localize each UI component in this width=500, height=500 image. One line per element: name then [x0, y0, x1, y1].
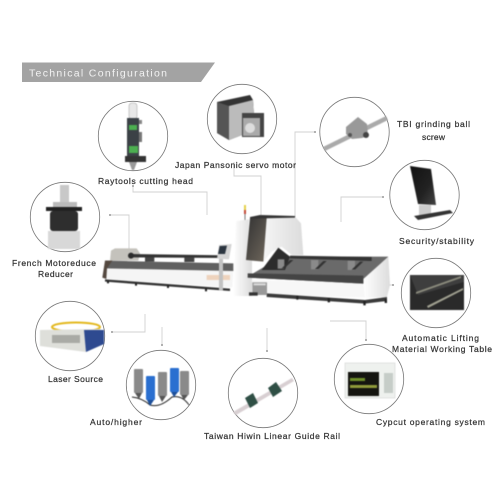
- title banner: [22, 62, 215, 82]
- right bed: [246, 215, 390, 305]
- panel: Auto/higher: [90, 350, 196, 427]
- panel: Laser Source: Laser Source: [48, 374, 103, 384]
- panel: Laser Source: [35, 301, 105, 384]
- panel: Japan Pansonic servo motor: [175, 84, 296, 170]
- icon: linear guide rail: [233, 378, 294, 415]
- icon: servo drive and motor: [217, 95, 264, 140]
- left bed: [102, 244, 233, 291]
- panel: French Motoreduce Reducer: [12, 182, 100, 279]
- title banner: Technical Configuration: [29, 68, 167, 80]
- icon: reducer: [46, 185, 82, 249]
- panel: French Motoreduce Reducer: French Motoreduce: [12, 258, 96, 268]
- panel: Cypcut operating system: [334, 344, 485, 427]
- panel: Security/stability: Security/stability: [399, 236, 475, 246]
- panel: TBI grinding ball screw: [320, 97, 470, 167]
- panel: Automatic Lifting Material Working Table: [392, 258, 492, 354]
- panel: TBI grinding ball screw: TBI grinding ball: [397, 119, 470, 129]
- panel: Raytools cutting head: [98, 101, 193, 186]
- warning light: [244, 205, 246, 210]
- panel: TBI grinding ball screw: screw: [422, 132, 446, 142]
- column: [233, 219, 252, 296]
- panel: Automatic Lifting Material Working Table: Automatic Lifting: [402, 333, 479, 343]
- panel: Cypcut operating system: Cypcut operating system: [376, 417, 485, 427]
- panel: French Motoreduce Reducer: Reducer: [38, 269, 73, 279]
- panel: Japan Pansonic servo motor: Japan Pansonic servo motor: [175, 160, 296, 170]
- icon: sensors: [132, 368, 189, 406]
- icon: cutting head: [125, 103, 146, 170]
- icon: software screen: [345, 363, 395, 398]
- icon: monitor on stand: [410, 166, 453, 220]
- panel: Taiwan Hiwin Linear Guide Rail: [204, 358, 340, 441]
- panel: Raytools cutting head: Raytools cutting head: [98, 176, 193, 186]
- panel: Automatic Lifting Material Working Table: Material Working Table: [392, 344, 492, 354]
- icon: ball screw: [323, 116, 388, 151]
- panel: Taiwan Hiwin Linear Guide Rail: Taiwan Hiwin Linear Guide Rail: [204, 431, 340, 441]
- panel: Auto/higher: Auto/higher: [90, 417, 142, 427]
- icon: working table photo: [410, 275, 464, 310]
- connector lines: [109, 131, 394, 352]
- laser cutting machine: [102, 205, 390, 305]
- icon: laser source unit: [40, 322, 104, 352]
- panel: Security/stability: [390, 160, 475, 246]
